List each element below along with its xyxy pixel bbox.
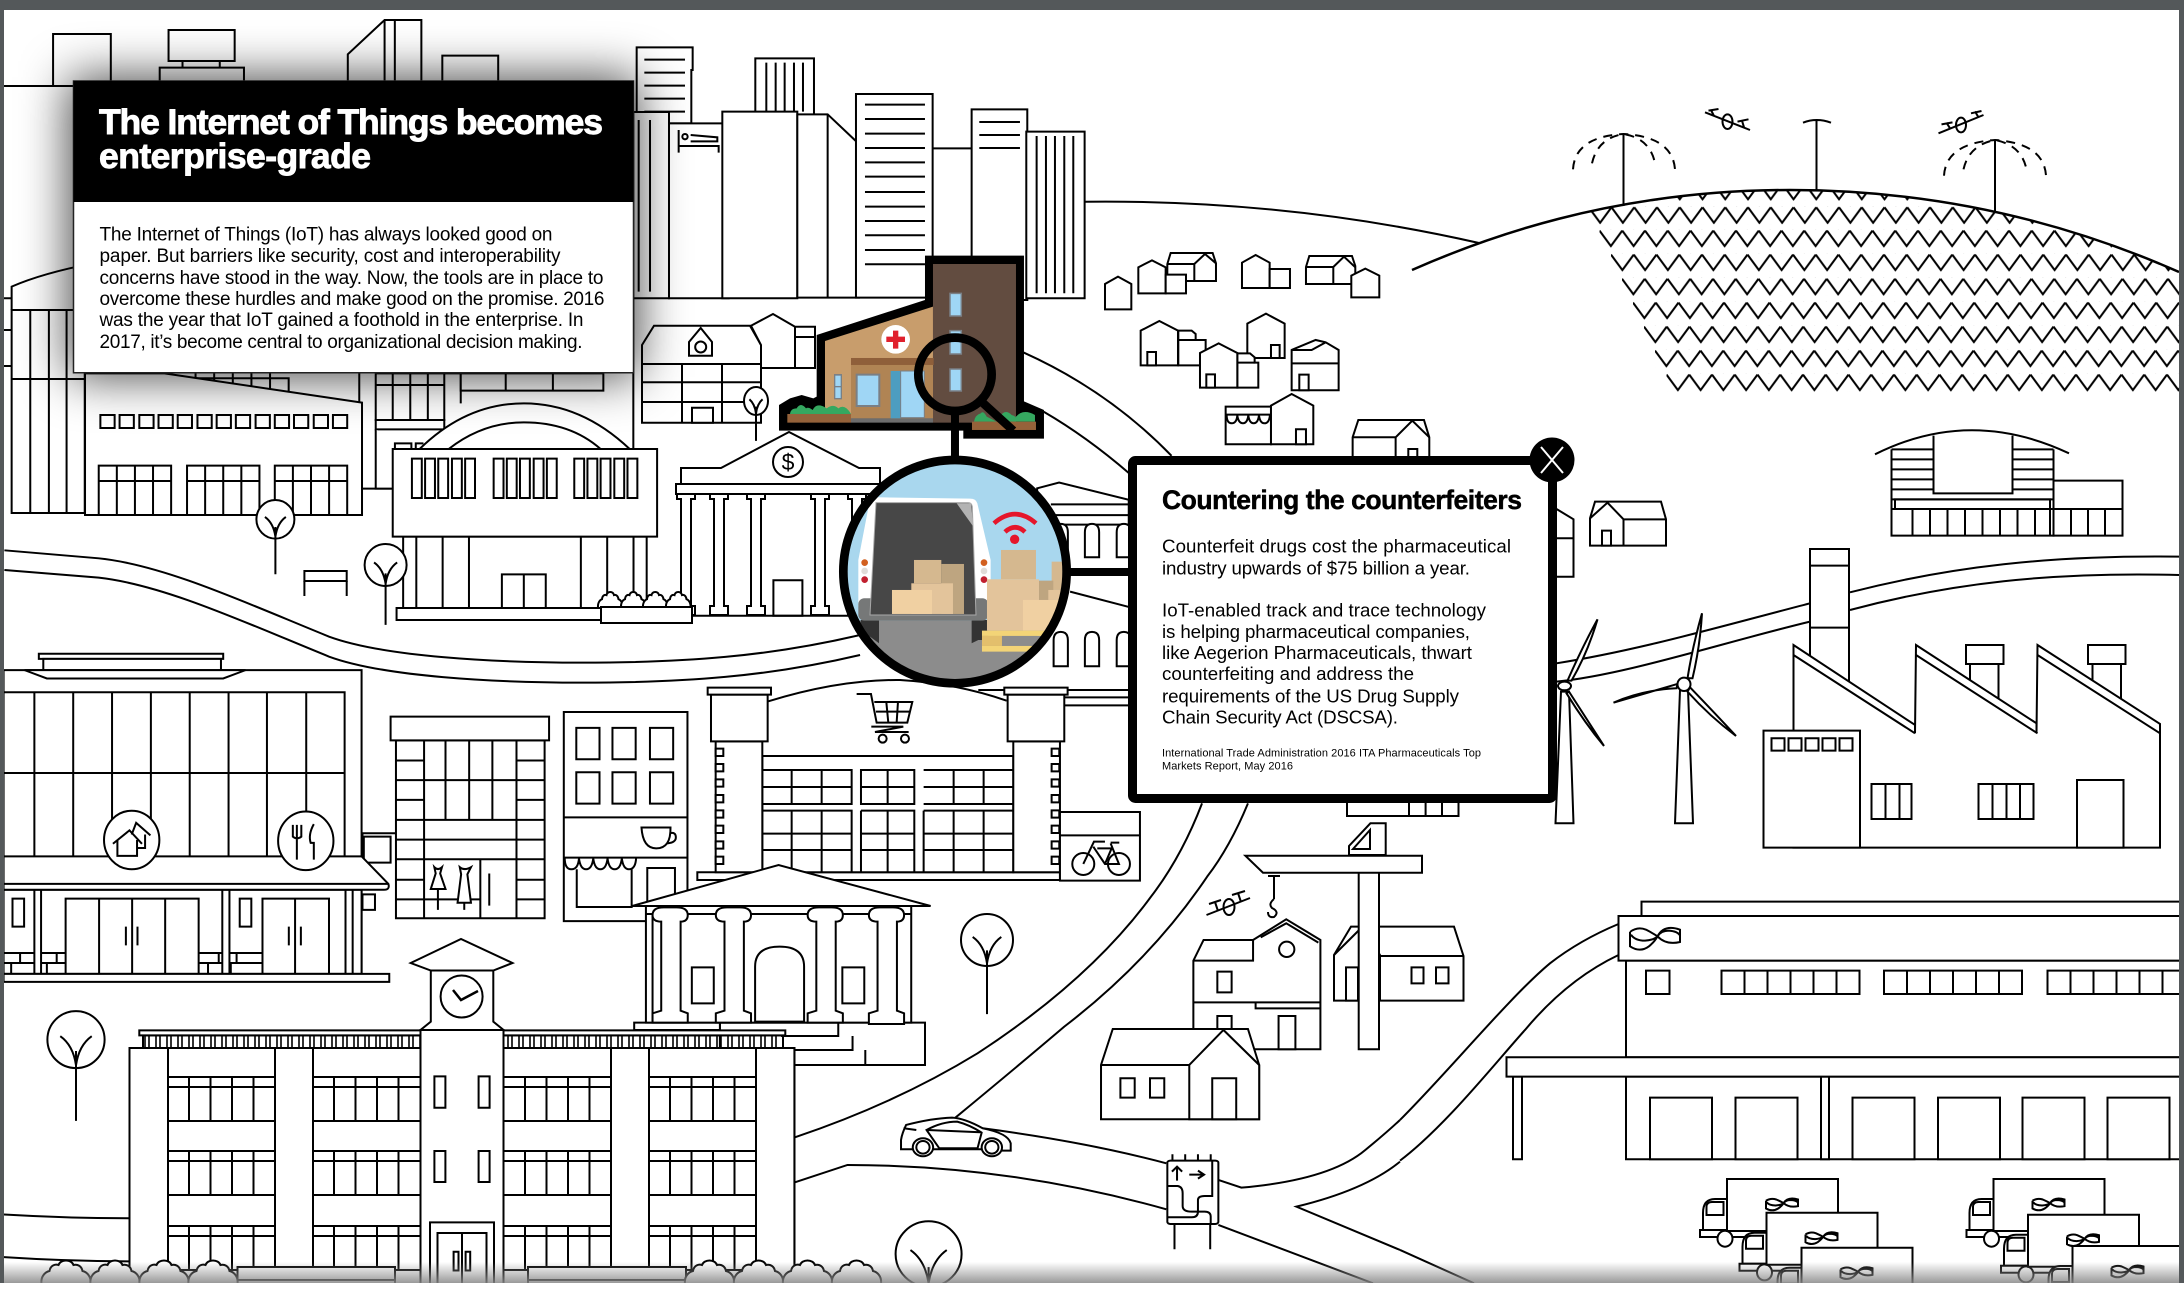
barn house by the panel bbox=[1590, 502, 1666, 546]
connector: lens to panel bbox=[1068, 568, 1132, 576]
title: enterprise-grade bbox=[99, 136, 371, 176]
panel shadow bbox=[69, 77, 638, 377]
stacked boxes on pallet bbox=[982, 550, 1065, 652]
portico building bbox=[632, 865, 931, 1065]
shopping mall bbox=[697, 680, 1140, 881]
left office block bbox=[85, 373, 603, 515]
icon: road sign bbox=[1167, 1154, 1218, 1249]
shrubs along main building bbox=[41, 1260, 881, 1284]
bottom edge fade bbox=[4, 1262, 2179, 1283]
warehouse bbox=[1506, 902, 2184, 1159]
icon: dollar sign: $ bbox=[782, 449, 795, 475]
icon: dresses bbox=[431, 867, 471, 910]
clock-sign building bbox=[642, 314, 815, 423]
cafe building bbox=[564, 712, 687, 921]
hidden house and box by the panel bbox=[1347, 505, 1574, 816]
panel text: requirements of the US Drug Supply bbox=[1162, 686, 1460, 707]
factory bbox=[1764, 549, 2160, 848]
icon: car bbox=[901, 1118, 1011, 1156]
planter with bushes bbox=[598, 592, 692, 623]
clothing store bbox=[391, 717, 549, 918]
icon: red cross bbox=[881, 325, 910, 354]
panel text: IoT-enabled track and trace technology bbox=[1162, 600, 1487, 620]
skyline towers bbox=[633, 47, 1085, 453]
icon: hotel bed bbox=[679, 130, 719, 153]
intro text: paper. But barriers like security, cost and interoperability bbox=[100, 246, 561, 267]
small trees and bench bbox=[256, 387, 768, 625]
lens: van being loaded bbox=[837, 453, 1077, 694]
title: The Internet of Things becomes bbox=[99, 102, 603, 142]
houses by the crane bbox=[1101, 919, 1320, 1119]
icon: coffee cup bbox=[641, 827, 676, 848]
source note bbox=[1162, 748, 1481, 773]
panel: counterfeiters bbox=[1132, 460, 1552, 798]
wind turbines bbox=[1556, 613, 1736, 823]
crane bbox=[1245, 823, 1422, 1049]
intro text: The Internet of Things (IoT) has always looked good on bbox=[100, 225, 552, 246]
intro text: concerns have stood in the way. Now, the tools are in place to bbox=[100, 268, 604, 289]
intro text: overcome these hurdles and make good on the promise. 2016 bbox=[100, 289, 604, 310]
house behind crane bbox=[1334, 927, 1464, 1001]
panel text: counterfeiting and address the bbox=[1162, 663, 1414, 684]
icon: hospital building bbox=[779, 256, 1044, 457]
icon: warehouse logo bbox=[1630, 928, 1680, 950]
icon: close button bbox=[1530, 438, 1574, 482]
source note: Markets Report, May 2016 bbox=[1162, 761, 1293, 773]
icon: bicycle bbox=[1072, 842, 1130, 875]
icon: wifi signal bbox=[994, 514, 1036, 544]
library building bbox=[393, 403, 657, 620]
icon: shopping cart bbox=[857, 694, 912, 743]
icon: home bbox=[104, 811, 159, 869]
panel text: industry upwards of $75 billion a year. bbox=[1162, 557, 1470, 578]
hospital outline bbox=[779, 256, 1044, 439]
building right of the lens bbox=[1037, 483, 1131, 666]
big hill bbox=[1412, 190, 2179, 272]
panel text: Counterfeit drugs cost the pharmaceutical bbox=[1162, 536, 1511, 557]
small hillside houses bbox=[1105, 253, 1429, 460]
panel text: like Aegerion Pharmaceuticals, thwart bbox=[1162, 642, 1473, 663]
panel header bbox=[74, 81, 634, 202]
panel text: is helping pharmaceutical companies, bbox=[1162, 621, 1470, 642]
icon: crane drone bbox=[1206, 891, 1250, 915]
source note: International Trade Administration 2016 ITA Pharmaceuticals Top bbox=[1162, 748, 1481, 760]
icon: clock bbox=[441, 976, 483, 1018]
panel text bbox=[1162, 536, 1511, 728]
intro text bbox=[98, 225, 604, 353]
skyline left of the intro panel bbox=[4, 20, 498, 513]
delivery trucks bbox=[1700, 1179, 2184, 1296]
magnifying glass bbox=[918, 338, 1013, 457]
hospital windows bbox=[834, 293, 961, 418]
intro text: 2017, it’s become central to organizational decision making. bbox=[100, 332, 582, 353]
panel: intro bbox=[74, 81, 634, 373]
left department store bbox=[4, 654, 395, 982]
icon: dollar sign bbox=[773, 447, 803, 477]
van bbox=[858, 497, 991, 643]
icon: drones bbox=[1705, 109, 1984, 133]
signal towers on the hill bbox=[1573, 120, 2046, 212]
panel text: Chain Security Act (DSCSA). bbox=[1162, 707, 1398, 728]
title bbox=[99, 102, 603, 176]
zigzag crop field bbox=[1577, 183, 2180, 392]
planters bbox=[787, 405, 1036, 430]
hilltop building bbox=[1875, 430, 2122, 536]
bank building bbox=[676, 432, 880, 616]
intro text: was the year that IoT gained a foothold in the enterprise. In bbox=[98, 310, 584, 331]
panel heading: Countering the counterfeiters bbox=[1162, 485, 1522, 515]
parkland trees bbox=[47, 914, 1013, 1296]
main building with clock tower bbox=[130, 939, 794, 1293]
icon: fork and knife bbox=[278, 812, 333, 870]
road bbox=[837, 621, 1077, 694]
hospital walls bbox=[825, 264, 1016, 423]
